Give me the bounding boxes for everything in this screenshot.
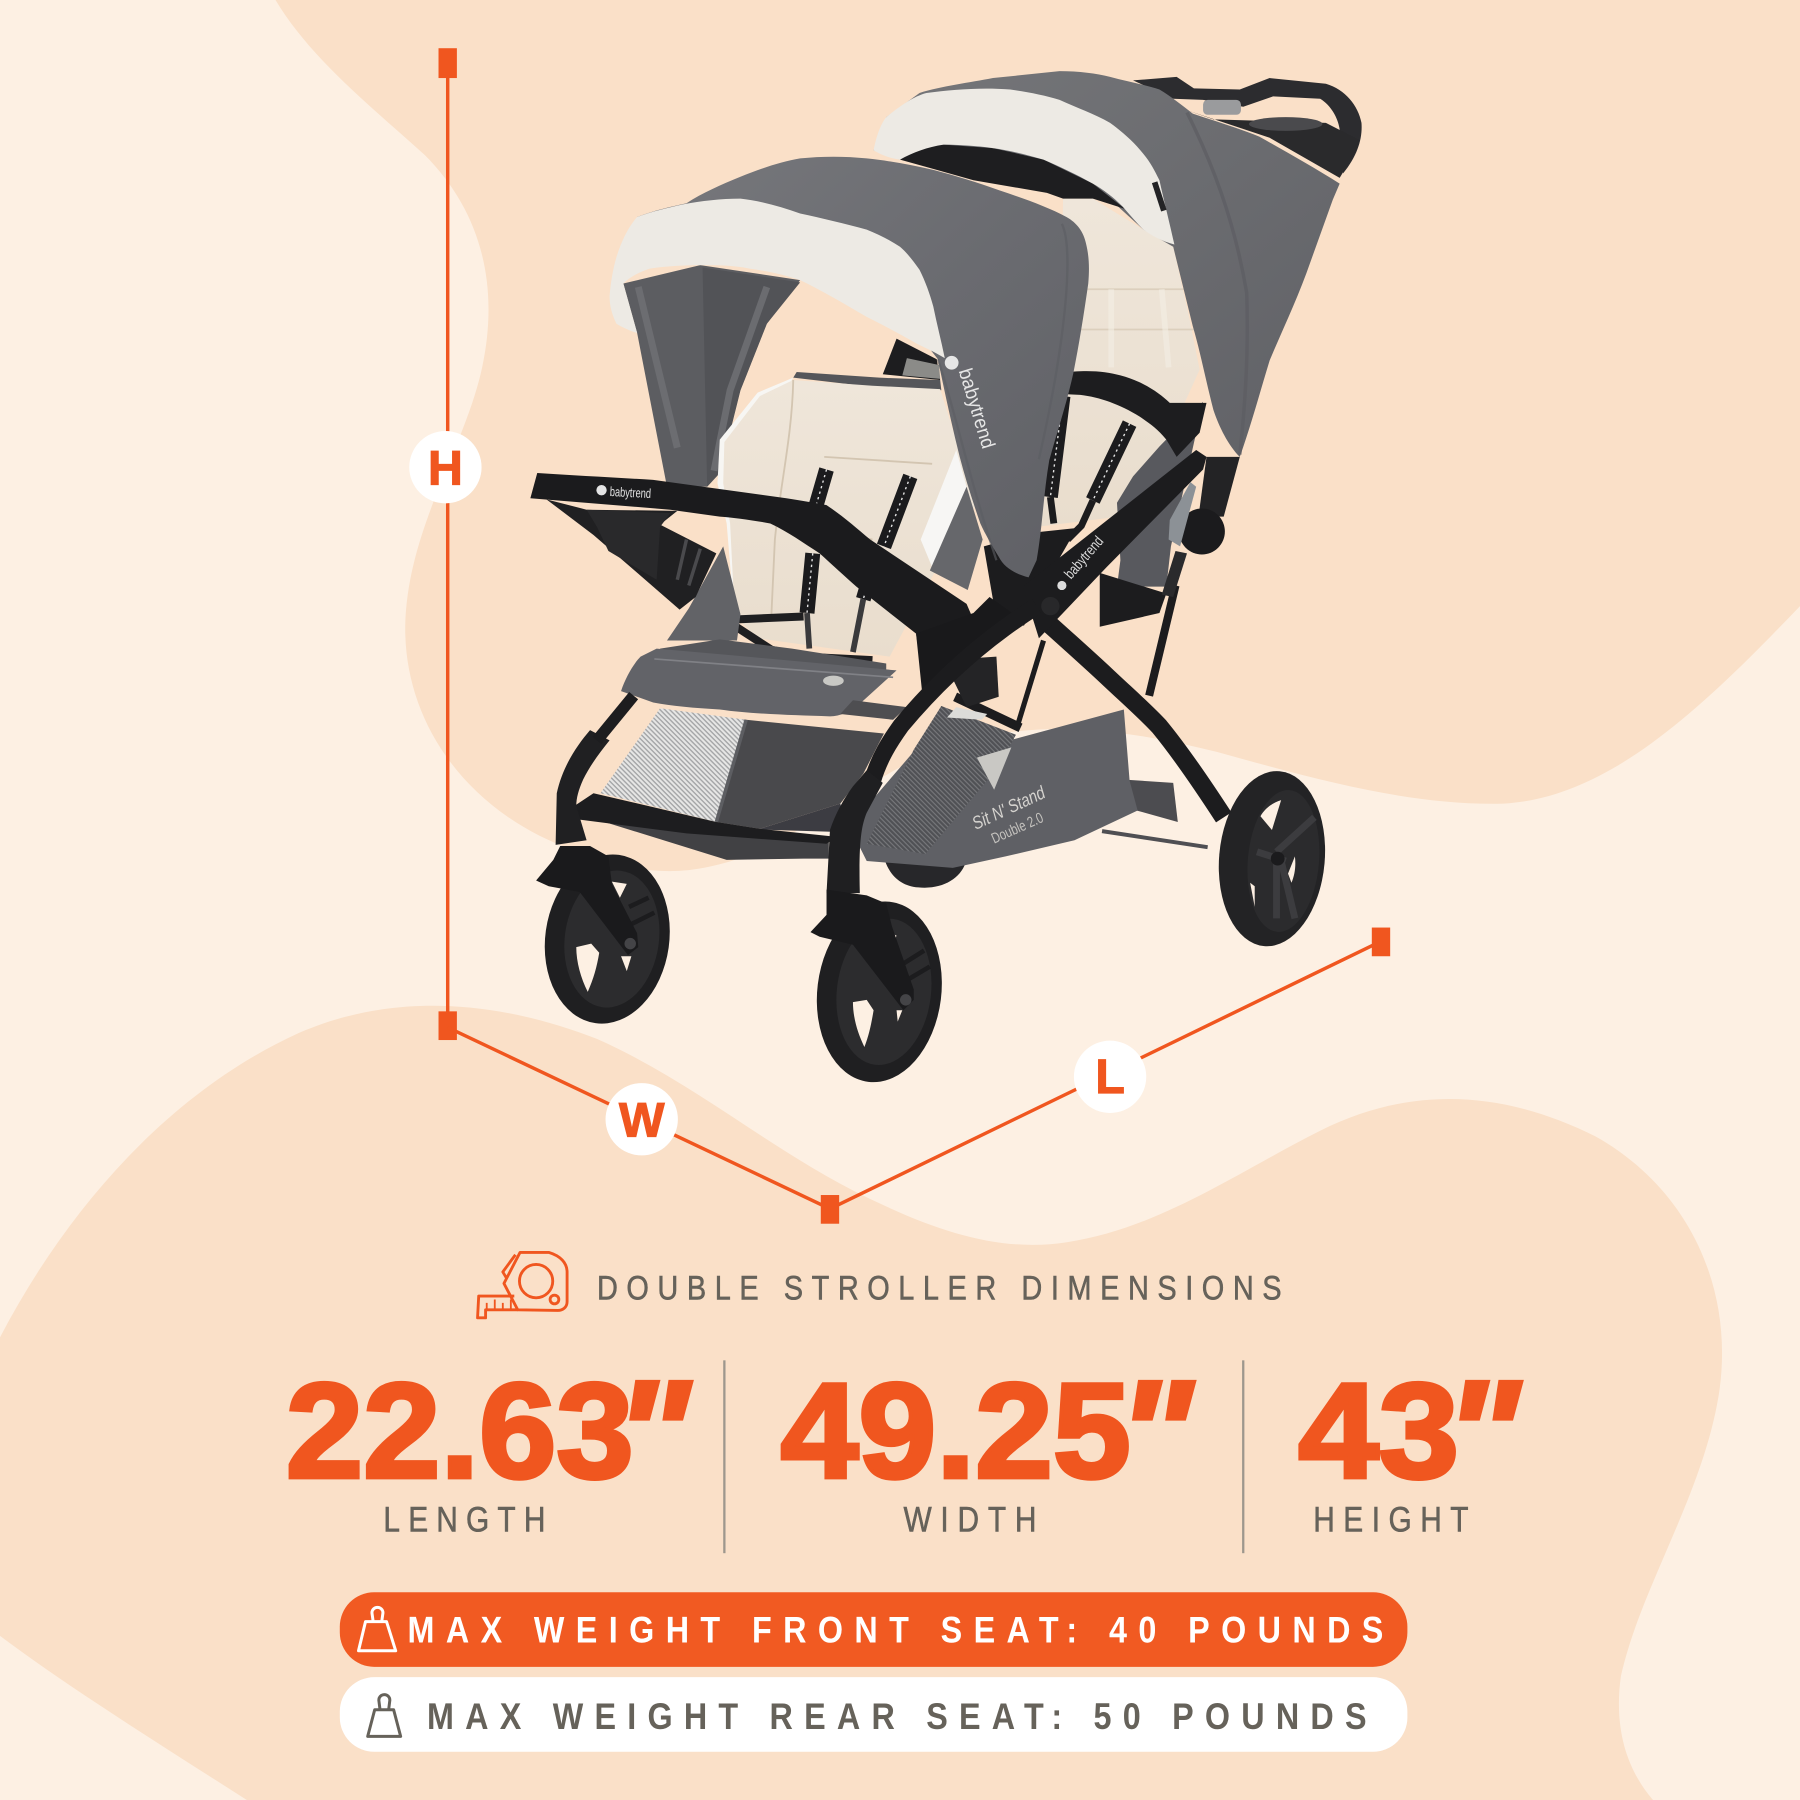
gray frame latch <box>1169 482 1196 546</box>
seat belt <box>726 616 872 660</box>
heading: double stroller dimensions: DOUBLE STROLLER DIMENSIONS <box>597 1268 1282 1307</box>
badge: W <box>606 1083 678 1155</box>
under rear seat dark parts <box>984 528 1166 627</box>
divider <box>723 1360 726 1553</box>
badge: W: W <box>619 1093 665 1147</box>
rear canopy seam <box>1187 112 1247 455</box>
main frame arc <box>872 606 1037 781</box>
height top cap <box>439 48 457 78</box>
wheel cutouts <box>1250 800 1295 907</box>
stat: height <box>1298 1349 1522 1539</box>
height bottom cap <box>439 1011 457 1040</box>
stat: length <box>286 1349 692 1539</box>
dimension line: height <box>439 48 457 1040</box>
front canopy interior <box>623 265 800 487</box>
badge: H: H <box>428 441 463 495</box>
seat base <box>660 639 886 677</box>
rear canopy <box>874 71 1362 457</box>
stat: height: 43 <box>1298 1354 1459 1506</box>
icon: weight rear <box>368 1695 401 1736</box>
front-left wheel <box>534 846 680 1032</box>
rear frame leg <box>1045 620 1224 817</box>
seat pad body <box>723 380 976 657</box>
rear handlebar <box>1133 77 1362 173</box>
stat: length: 22.63 <box>286 1354 634 1506</box>
plate under flap <box>840 700 907 720</box>
wheel cutouts <box>576 882 631 992</box>
rear canopy shell <box>874 71 1340 457</box>
seat tufting <box>771 380 932 614</box>
storage basket: Double 2.0 <box>989 809 1046 847</box>
pill: max weight front seat: MAX WEIGHT FRONT SEAT: 40 POUNDS <box>408 1611 1383 1651</box>
stat: length: " <box>614 1349 692 1516</box>
stat: width <box>781 1349 1195 1539</box>
underside of lower bar <box>597 820 829 860</box>
frame logo: babytrend <box>1061 533 1107 582</box>
X frame bar <box>1023 450 1207 638</box>
front seat pad <box>660 372 983 677</box>
rear seat pad <box>1037 199 1200 527</box>
stat: height: HEIGHT <box>1313 1499 1469 1539</box>
seat white edge <box>717 378 793 620</box>
divider <box>1242 1360 1244 1553</box>
bumper logo <box>596 484 651 501</box>
left upper strut <box>597 696 634 740</box>
right cap <box>1372 928 1390 956</box>
badge: L: L <box>1095 1050 1125 1104</box>
seat right white edge <box>921 450 967 567</box>
bumper tray arm <box>546 499 716 610</box>
basket print: Sit N' Stand <box>969 781 1049 834</box>
rear handlebar clip <box>1203 100 1241 115</box>
headrest support <box>883 339 940 380</box>
rear tray <box>1187 110 1359 178</box>
frame logo <box>1057 533 1107 590</box>
black side panel <box>916 597 1022 700</box>
dark opening under rear canopy <box>900 145 1125 209</box>
pill: max weight rear seat: MAX WEIGHT REAR SEAT: 50 POUNDS <box>427 1697 1367 1737</box>
badge: H <box>409 431 482 503</box>
rear-right wheel <box>1212 767 1332 951</box>
front-right wheel <box>807 890 952 1089</box>
right front leg <box>827 770 883 893</box>
stat: width: WIDTH <box>903 1499 1037 1539</box>
canopy seam <box>938 224 1067 560</box>
stat: height: " <box>1444 1349 1522 1516</box>
under-seat storage <box>600 708 884 832</box>
canopy shell <box>637 157 1089 577</box>
rear platform and axle <box>1102 779 1208 847</box>
cup holder <box>587 510 670 580</box>
icon: weight front <box>359 1607 396 1651</box>
background blob: lower <box>0 1006 1722 1800</box>
dimension line: width and length <box>448 928 1390 1224</box>
rear harness straps <box>1050 396 1130 540</box>
front bumper bar <box>530 473 973 683</box>
left fork <box>536 846 638 955</box>
rear support struts <box>955 585 1176 728</box>
canopy visor <box>610 199 945 358</box>
storage basket <box>849 706 1138 868</box>
footrest flap <box>621 649 897 716</box>
side fabric <box>667 546 740 641</box>
bumper logo: babytrend <box>609 484 651 501</box>
front harness <box>807 470 910 652</box>
rear tray cup <box>1249 117 1322 131</box>
badge: L <box>1074 1041 1146 1113</box>
front canopy <box>610 157 1089 577</box>
icon: tape measure <box>478 1252 567 1318</box>
pill: max weight rear seat <box>340 1677 1407 1752</box>
rear canopy visor <box>874 89 1174 245</box>
canopy logo: babytrend <box>954 366 999 451</box>
far rear wheel <box>885 861 965 888</box>
front lower bar <box>569 793 837 844</box>
rear canopy tag <box>1152 181 1167 212</box>
stat: length: LENGTH <box>383 1499 545 1539</box>
wheel cutouts <box>853 932 902 1047</box>
stat: width: " <box>1117 1349 1195 1516</box>
black box behind frame <box>944 657 999 707</box>
pill: max weight front seat <box>340 1592 1407 1667</box>
stat: width: 49.25 <box>781 1354 1131 1506</box>
right fork <box>810 890 914 1010</box>
seat side mesh <box>930 487 983 590</box>
rear post and hub <box>1162 457 1240 597</box>
seat top rim <box>793 372 941 390</box>
background blob: upper <box>276 0 1800 871</box>
left front leg <box>556 730 610 845</box>
rear seat side fabric <box>1117 402 1203 587</box>
middle cap <box>821 1195 839 1224</box>
stroller illustration <box>530 71 1362 1089</box>
rear bumper bar <box>1056 371 1207 457</box>
